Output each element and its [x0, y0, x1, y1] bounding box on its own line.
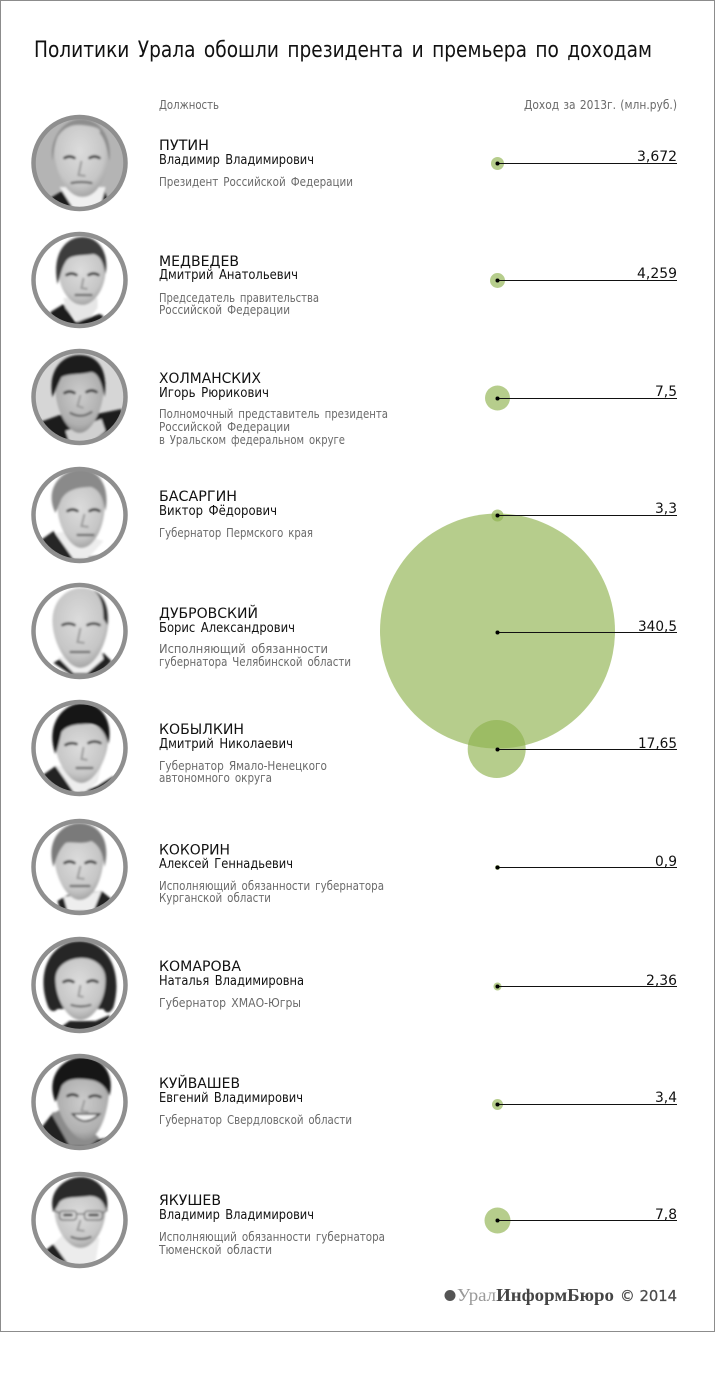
bubble: Комарова	[494, 982, 677, 990]
value: 7,8	[655, 1207, 677, 1223]
column heading: income: Доход за 2013г. (млн.руб.)	[524, 97, 677, 112]
position	[159, 291, 319, 317]
first names: Виктор Фёдорович	[159, 504, 277, 519]
surname: КОМАРОВА	[159, 959, 241, 975]
bubble: Куйвашев	[492, 1099, 677, 1110]
position: автономного округа	[159, 771, 272, 785]
portrait: Путин	[34, 117, 126, 211]
surname: ДУБРОВСКИЙ	[159, 604, 258, 622]
portrait: Дубровский	[34, 585, 126, 677]
portrait: Басаргин	[34, 469, 126, 563]
position	[159, 759, 327, 785]
first names: Наталья Владимировна	[159, 974, 304, 989]
first names: Алексей Геннадьевич	[159, 857, 293, 872]
first names: Дмитрий Анатольевич	[159, 268, 298, 283]
first names: Дмитрий Николаевич	[159, 737, 293, 752]
first names: Борис Александрович	[159, 621, 295, 636]
surname: ПУТИН	[159, 138, 209, 154]
row: Дубровский	[34, 585, 677, 677]
position: Российской Федерации	[159, 420, 290, 434]
bubble: Холманских	[485, 386, 677, 410]
position: Полномочный представитель президента	[159, 407, 388, 421]
logo wordmark: УралИнформБюро	[457, 1285, 614, 1305]
portrait: Холманских	[34, 351, 126, 445]
row: Путин	[34, 117, 677, 211]
value: 0,9	[655, 854, 677, 870]
position	[159, 879, 384, 905]
bubble: Путин	[491, 157, 677, 170]
bubble: Басаргин	[492, 510, 677, 522]
row: Куйвашев	[34, 1056, 677, 1150]
bubble: Кобылкин	[468, 720, 677, 778]
position: Тюменской области	[158, 1243, 272, 1257]
position: Исполняющий обязанности губернатора	[159, 1230, 385, 1244]
value: 3,4	[655, 1090, 677, 1106]
column heading: position: Должность	[159, 97, 219, 112]
first names: Евгений Владимирович	[159, 1091, 303, 1106]
position: Губернатор Свердловской области	[159, 1113, 352, 1127]
portrait: Якушев	[34, 1174, 126, 1268]
row: Кокорин	[34, 821, 677, 915]
bubble chart	[380, 157, 677, 1234]
surname: ХОЛМАНСКИХ	[159, 371, 261, 387]
portrait: Комарова	[34, 939, 126, 1033]
portrait: Медведев	[34, 234, 126, 328]
row: Медведев	[34, 234, 677, 328]
copyright: © 2014	[620, 1287, 677, 1305]
value: 3,3	[655, 501, 677, 517]
position: Губернатор ХМАО-Югры	[159, 996, 301, 1010]
position: Исполняющий обязанности	[159, 642, 328, 656]
bubble: Дубровский	[380, 514, 677, 748]
first names: Владимир Владимирович	[159, 153, 314, 168]
position: Губернатор Ямало-Ненецкого	[159, 759, 327, 773]
row: Холманских	[34, 351, 677, 447]
value: 3,672	[637, 149, 677, 165]
value: 340,5	[638, 619, 677, 635]
surname: КУЙВАШЕВ	[159, 1074, 240, 1092]
position	[159, 642, 351, 669]
position: Губернатор Пермского края	[159, 526, 313, 540]
position	[158, 1230, 385, 1257]
portrait: Кобылкин	[34, 702, 126, 796]
first names: Игорь Рюрикович	[159, 386, 269, 401]
position: Российской Федерации	[159, 303, 290, 317]
value: 7,5	[655, 384, 677, 400]
position: в Уральском федеральном округе	[159, 433, 345, 447]
bubble: Якушев	[484, 1208, 677, 1234]
surname: КОКОРИН	[159, 842, 230, 858]
logo and copyright	[444, 1285, 677, 1305]
position: Курганской области	[159, 891, 271, 905]
value: 2,36	[646, 973, 677, 989]
row: Кобылкин	[34, 702, 677, 796]
value: 4,259	[637, 266, 677, 282]
bubble: Медведев	[490, 273, 677, 288]
position: Исполняющий обязанности губернатора	[159, 879, 384, 893]
surname: КОБЫЛКИН	[159, 722, 244, 738]
row: Комарова	[34, 939, 677, 1033]
surname: ЯКУШЕВ	[159, 1193, 221, 1209]
surname: БАСАРГИН	[159, 489, 237, 505]
portrait: Кокорин	[34, 821, 126, 915]
row: Басаргин	[34, 469, 677, 563]
value: 17,65	[638, 736, 677, 752]
row: Якушев	[34, 1174, 677, 1268]
position	[159, 407, 388, 447]
bubble: Кокорин	[495, 865, 677, 870]
portrait: Куйвашев	[34, 1056, 126, 1150]
position: Председатель правительства	[159, 291, 319, 305]
first names: Владимир Владимирович	[159, 1208, 314, 1223]
position: губернатора Челябинской области	[159, 655, 351, 669]
position: Президент Российской Федерации	[159, 175, 353, 189]
logo dot	[444, 1290, 456, 1301]
surname: МЕДВЕДЕВ	[159, 254, 239, 270]
